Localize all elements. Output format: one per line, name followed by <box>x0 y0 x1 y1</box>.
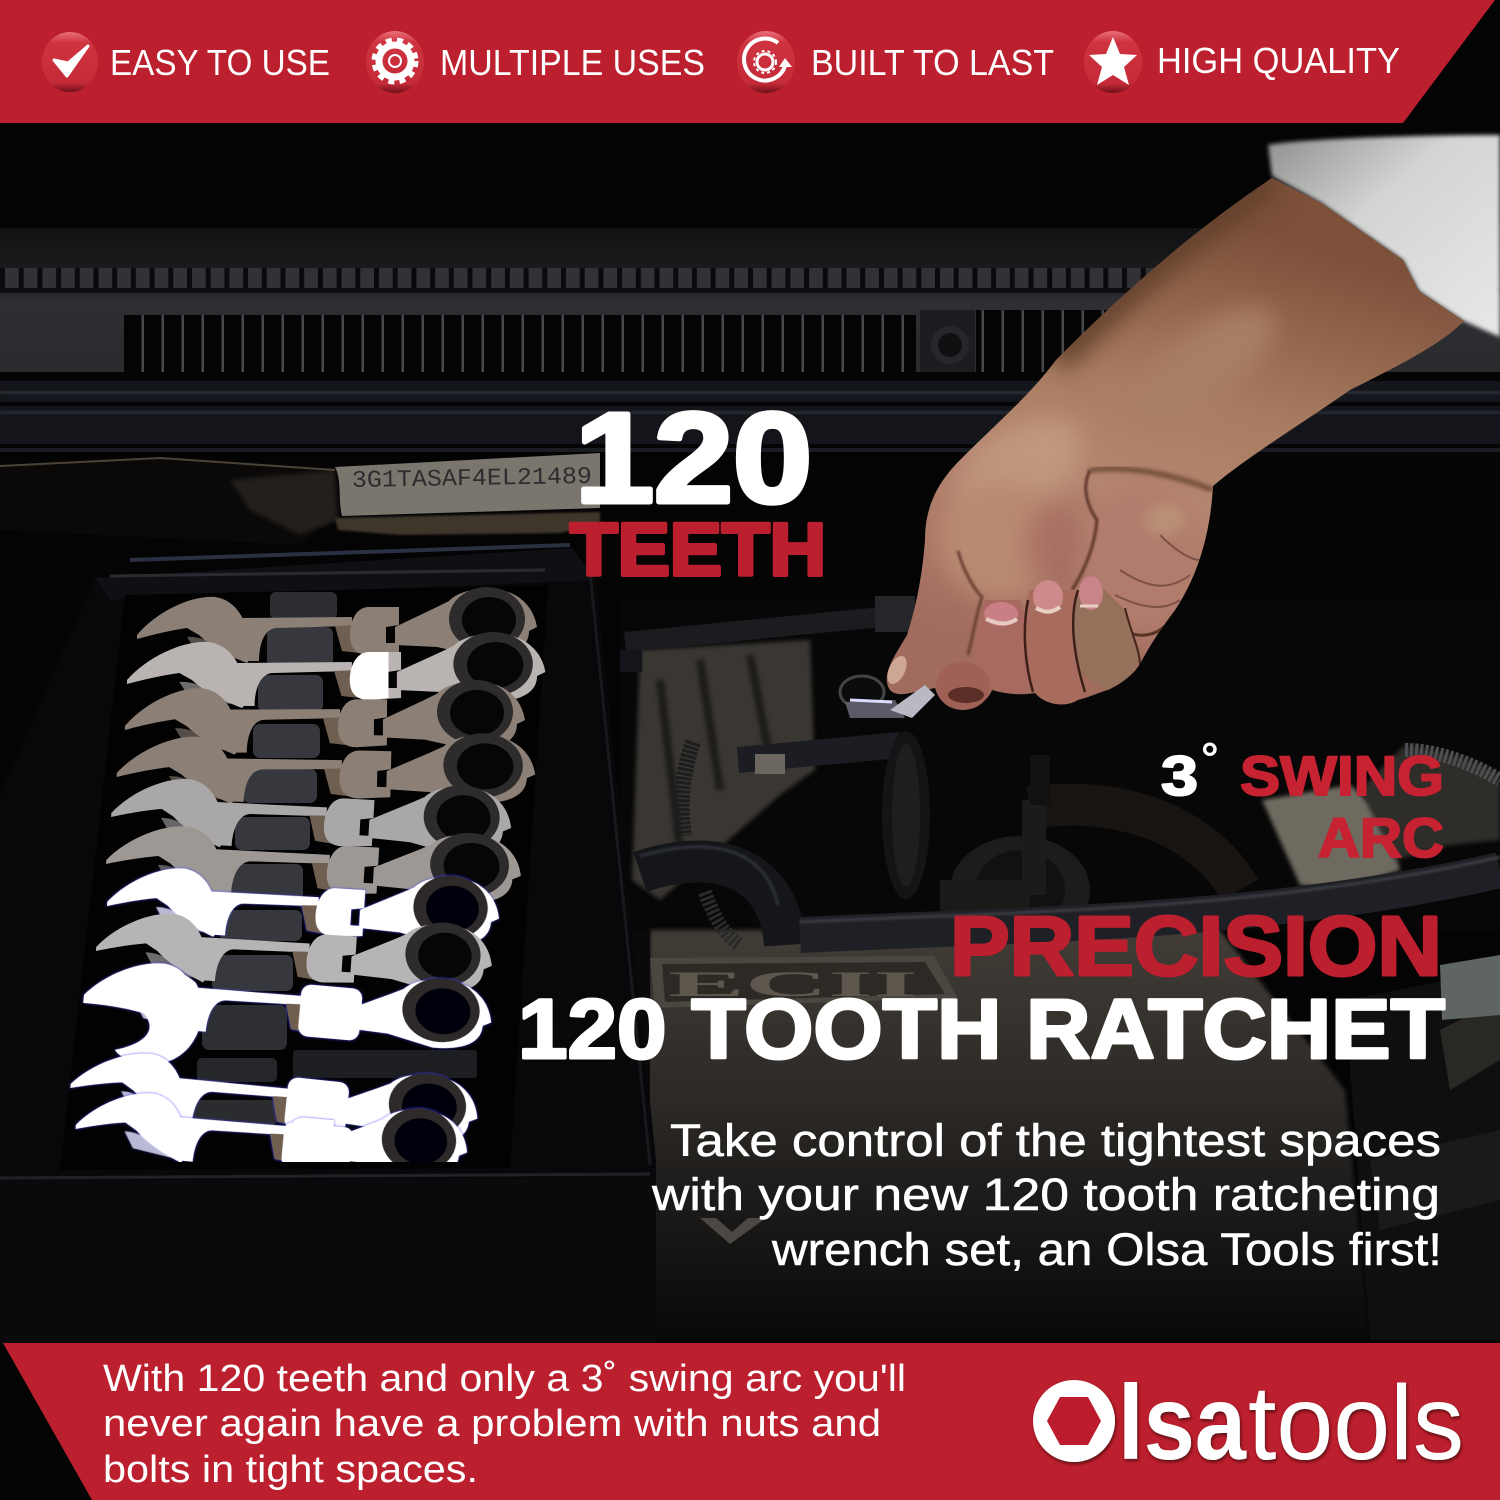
VIN plate: 3G1TASAF4EL21489 <box>352 464 592 495</box>
bottom text: never again have a problem with nuts and <box>103 1403 881 1445</box>
icon: check <box>42 32 98 92</box>
callout: 3 degree swing arc <box>1161 734 1444 869</box>
ECII plate <box>650 956 958 1008</box>
throttle body <box>632 640 815 900</box>
wrench 11 <box>74 1091 469 1162</box>
label: easy to use: EASY TO USE <box>110 42 330 83</box>
bottom text <box>103 1358 906 1491</box>
bottom banner <box>3 1343 1500 1500</box>
callout: 120 teeth <box>570 387 826 591</box>
wrench 5 <box>111 779 512 848</box>
callout: 3 degree swing arc: ° <box>1201 734 1219 783</box>
engine cover <box>640 930 1370 1340</box>
logo: Olsatools <box>1033 1364 1464 1482</box>
description text <box>651 1115 1442 1275</box>
wrench 6 <box>106 826 521 900</box>
nails <box>984 602 1018 626</box>
top banner <box>0 0 1495 123</box>
icon: gear <box>366 31 424 93</box>
label: multiple uses: MULTIPLE USES <box>440 42 705 83</box>
logo: Olsatools: tools <box>1248 1364 1464 1482</box>
description text: with your new 120 tooth ratcheting <box>651 1169 1440 1220</box>
forearm and hand <box>883 178 1464 710</box>
description text: wrench set, an Olsa Tools first! <box>771 1224 1442 1275</box>
wrench 9 <box>81 962 493 1063</box>
VIN plate <box>0 453 600 560</box>
label: built to last: BUILT TO LAST <box>811 42 1054 83</box>
wrench 1 <box>137 587 537 663</box>
callout: 3 degree swing arc: 3 <box>1161 744 1198 807</box>
logo: Olsatools: lsa <box>1118 1364 1247 1482</box>
sleeve <box>1268 135 1500 337</box>
label: high quality: HIGH QUALITY <box>1157 40 1400 81</box>
callout: 120 teeth: TEETH <box>570 508 826 591</box>
ratchet in hand <box>840 676 935 718</box>
icon: star <box>1084 31 1142 93</box>
callout: 120 teeth: 120 <box>575 387 812 530</box>
bottom text: With 120 teeth and only a 3˚ swing arc you'll <box>103 1358 906 1400</box>
wrench 10 <box>68 1052 480 1136</box>
hose arc and pulley <box>1030 805 1240 890</box>
engine bay: cowl and vent <box>0 228 1500 642</box>
reservoir and corrugated hose <box>1262 785 1400 890</box>
logo: Olsatools: O <box>1033 1364 1115 1482</box>
bottom text: bolts in tight spaces. <box>103 1449 478 1491</box>
wrench 7 <box>105 866 501 941</box>
wrench 4 <box>116 733 536 803</box>
description text: Take control of the tightest spaces <box>670 1115 1441 1166</box>
heading: precision: PRECISION <box>950 899 1442 993</box>
engine parts: ECII <box>668 964 918 1004</box>
engine parts <box>620 596 1500 1340</box>
callout: 3 degree swing arc: SWING <box>1240 744 1444 807</box>
wrench 3 <box>125 678 525 756</box>
heading: 120 tooth ratchet: 120 TOOTH RATCHET <box>518 982 1445 1076</box>
wrenches <box>68 587 545 1188</box>
callout: 3 degree swing arc: ARC <box>1318 806 1444 869</box>
fingers <box>978 600 1024 694</box>
tray with wrench sockets <box>0 548 656 1345</box>
wrench 8 <box>96 914 492 988</box>
wrench 2 <box>127 632 545 708</box>
long hoses <box>640 861 785 945</box>
icon: cycle gear <box>737 31 795 93</box>
